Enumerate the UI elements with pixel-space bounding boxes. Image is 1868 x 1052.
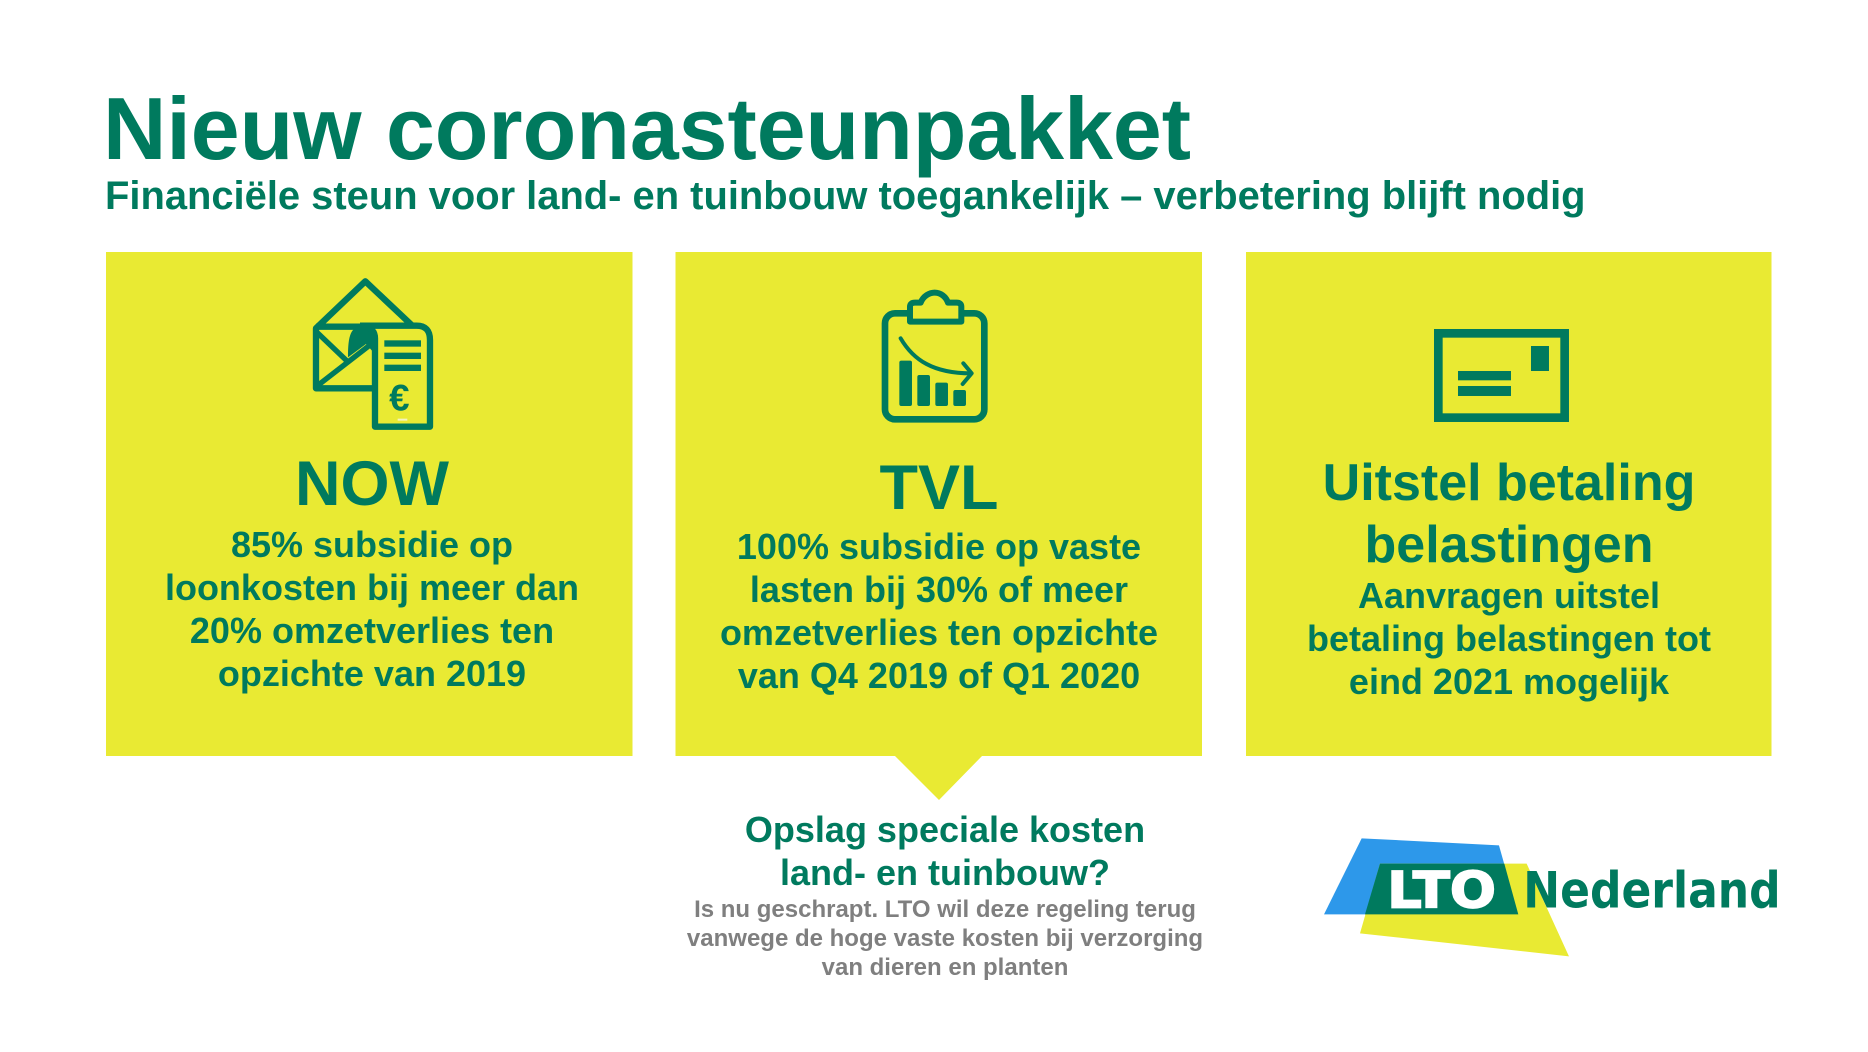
panel: NOW xyxy=(106,252,632,756)
callout text xyxy=(687,896,1203,981)
heading: Uitstel betaling belastingen xyxy=(1323,454,1695,574)
callout heading: Opslag speciale kosten xyxy=(745,809,1145,850)
text: NOW description: 85% subsidie op xyxy=(231,524,513,565)
text: TVL description xyxy=(720,526,1158,696)
text: Uitstel description: eind 2021 mogelijk xyxy=(1349,661,1670,702)
text: NOW description: 20% omzetverlies ten xyxy=(190,610,554,651)
logo: LTO Nederland: LTO xyxy=(1387,861,1496,919)
text: TVL description: 100% subsidie op vaste xyxy=(737,526,1141,567)
heading: Uitstel betaling belastingen: belastingen xyxy=(1365,516,1653,574)
heading: Uitstel betaling belastingen: Uitstel betaling xyxy=(1323,454,1695,512)
text: Uitstel description xyxy=(1307,575,1711,702)
panel: TVL xyxy=(676,252,1202,800)
callout: Opslag speciale kosten xyxy=(687,809,1203,981)
icon: envelope with invoice xyxy=(316,281,430,427)
text: NOW description xyxy=(165,524,579,694)
heading: TVL: TVL xyxy=(880,453,998,523)
logo: LTO Nederland xyxy=(1324,838,1781,956)
text: NOW description: loonkosten bij meer dan xyxy=(165,567,579,608)
callout heading xyxy=(745,809,1145,893)
text: NOW description: opzichte van 2019 xyxy=(218,653,526,694)
text: TVL description: van Q4 2019 of Q1 2020 xyxy=(738,655,1140,696)
title: Nieuw coronasteunpakket xyxy=(103,80,1191,178)
icon: postcard xyxy=(1438,333,1565,418)
panel: Uitstel betaling belastingen xyxy=(1246,252,1772,756)
icon: clipboard with declining chart xyxy=(885,293,984,419)
callout text: vanwege de hoge vaste kosten bij verzorging xyxy=(687,925,1203,952)
text: TVL description: lasten bij 30% of meer xyxy=(750,569,1128,610)
heading: NOW: NOW xyxy=(295,449,450,519)
callout text: Is nu geschrapt. LTO wil deze regeling terug xyxy=(694,896,1196,923)
icon: envelope with invoice: € xyxy=(389,378,410,419)
text: TVL description: omzetverlies ten opzichte xyxy=(720,612,1158,653)
subtitle: Financiële steun voor land- en tuinbouw toegankelijk – verbetering blijft nodig xyxy=(105,174,1586,218)
callout heading: land- en tuinbouw? xyxy=(780,852,1110,893)
text: Uitstel description: Aanvragen uitstel xyxy=(1358,575,1660,616)
logo: LTO Nederland: Nederland xyxy=(1523,861,1781,919)
text: Uitstel description: betaling belastingen tot xyxy=(1307,618,1711,659)
callout text: van dieren en planten xyxy=(822,954,1068,981)
